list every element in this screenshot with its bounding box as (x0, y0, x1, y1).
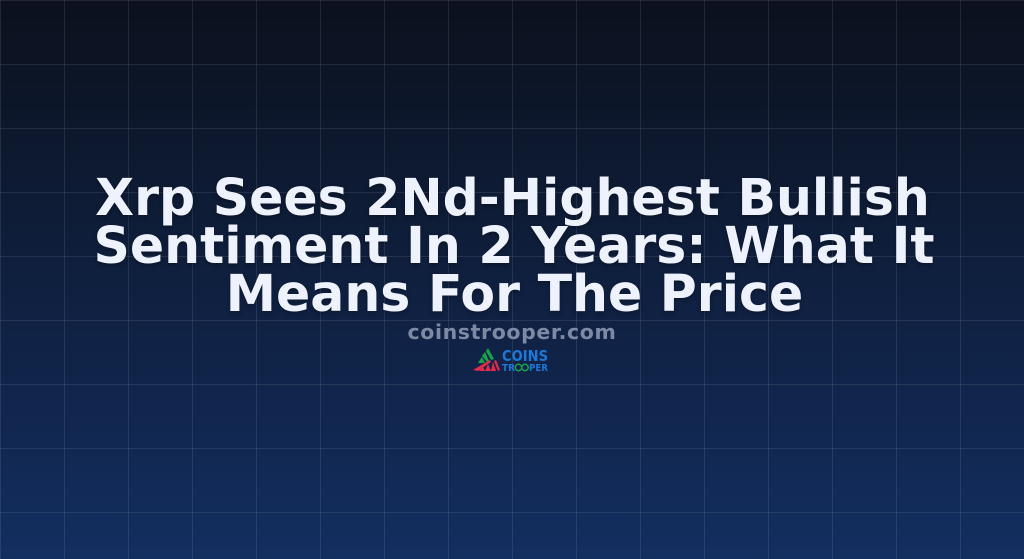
wordmark: TROOPER: TR (502, 363, 516, 374)
website label: coinstrooper.com (408, 320, 616, 344)
title: Xrp Sees 2Nd-Highest Bullish (95, 168, 930, 227)
title (94, 168, 934, 323)
wordmark: TROOPER: PER (529, 363, 549, 374)
title: Means For The Price (226, 264, 803, 323)
wordmark: TROOPER (502, 363, 549, 374)
logo: Coins Trooper (473, 348, 549, 374)
icon: green chart bars (478, 348, 494, 363)
icon: red chart bars (473, 360, 500, 371)
title: Sentiment In 2 Years: What It (94, 216, 934, 275)
